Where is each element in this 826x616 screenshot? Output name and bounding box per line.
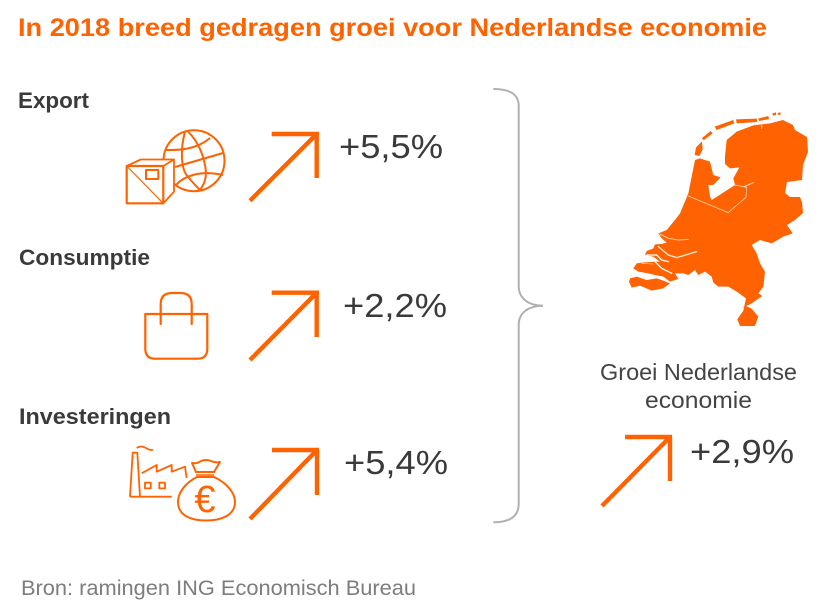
heading: investeringen: Investeringen [19, 404, 171, 429]
map: Netherlands [629, 112, 808, 326]
icon: factory and money bag: € [194, 479, 216, 521]
value: investeringen: +5,4% [344, 444, 448, 481]
icon: box and globe [127, 130, 224, 203]
value: export: +5,5% [339, 128, 443, 165]
value: total: +2,9% [690, 433, 794, 470]
heading: consumptie: Consumptie [19, 245, 150, 270]
icon: shopping bag [145, 293, 207, 359]
caption: groei nederlandse economie [600, 359, 797, 413]
caption: groei nederlandse economie: Groei Nederlandse [600, 359, 797, 385]
source: Bron: ramingen ING Economisch Bureau [21, 577, 416, 600]
arrow: export up [250, 134, 319, 201]
value: consumptie: +2,2% [343, 287, 447, 324]
island: Texel [695, 141, 703, 156]
heading: export: Export [18, 88, 90, 113]
title: In 2018 breed gedragen groei voor Nederlandse economie [18, 14, 767, 42]
brace [493, 89, 543, 522]
caption: groei nederlandse economie: economie [645, 387, 752, 413]
arrow: total up [602, 437, 672, 506]
icon: factory and money bag [130, 446, 235, 521]
island: Zeeuws-Vlaanderen [629, 277, 670, 291]
arrow: consumptie up [250, 293, 319, 360]
arrow: investeringen up [250, 450, 319, 519]
islands: Wadden [702, 112, 781, 140]
